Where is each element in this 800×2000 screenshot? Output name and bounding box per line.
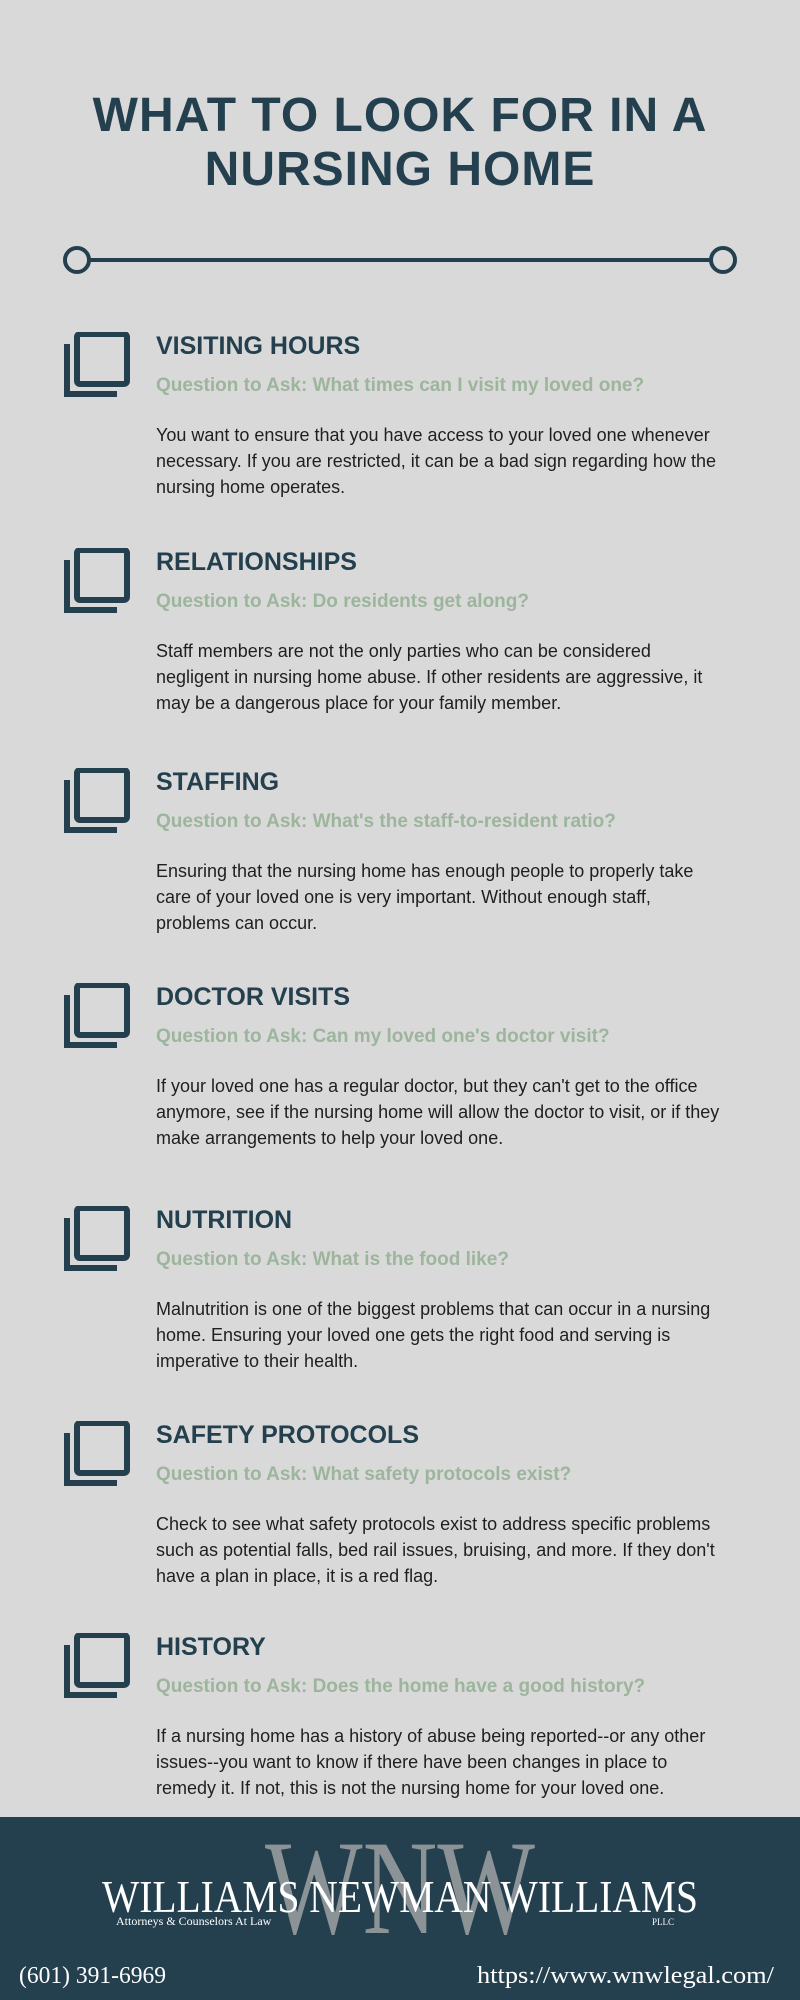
section: nutrition [64, 1206, 710, 1371]
heading: STAFFING [156, 768, 279, 796]
icon [64, 768, 130, 833]
question: Question to Ask: Does the home have a good history? [156, 1676, 645, 1697]
body: Malnutrition is one of the biggest problems that can occur in a nursing home. Ensuring your loved one gets the right food and serving is imperative to their health. [156, 1299, 710, 1371]
footer [0, 1817, 800, 2000]
title: WHAT TO LOOK FOR IN A [93, 89, 707, 142]
logo: WILLIAMS NEWMAN WILLIAMS [102, 1871, 698, 1922]
title [92, 89, 707, 196]
question: Question to Ask: What safety protocols exist? [156, 1464, 571, 1485]
icon [64, 1633, 130, 1698]
title: NURSING HOME [205, 143, 595, 196]
body: You want to ensure that you have access to your loved one whenever necessary. If you are restricted, it can be a bad sign regarding how the nursing home operates. [156, 425, 716, 497]
body: Ensuring that the nursing home has enough people to properly take care of your loved one is very important. Without enough staff, problems can occur. [156, 861, 693, 933]
question: Question to Ask: What times can I visit my loved one? [156, 375, 644, 396]
logo: PLLC [652, 1917, 674, 1927]
body: Staff members are not the only parties who can be considered negligent in nursing home abuse. If other residents are aggressive, it may be a dangerous place for your family member. [156, 641, 702, 713]
icon [64, 1206, 130, 1271]
body: If your loved one has a regular doctor, but they can't get to the office anymore, see if the nursing home will allow the doctor to visit, or if they make arrangements to help your loved one. [156, 1076, 719, 1148]
icon [64, 983, 130, 1048]
section: relationships [64, 548, 702, 713]
divider with circles [63, 246, 737, 274]
body: If a nursing home has a history of abuse being reported--or any other issues--you want to know if there have been changes in place to remedy it. If not, this is not the nursing home for your loved one. [156, 1726, 705, 1798]
icon [64, 548, 130, 613]
heading: VISITING HOURS [156, 332, 360, 360]
website: https://www.wnwlegal.com/ [477, 1963, 774, 1989]
section: safety protocols [64, 1421, 715, 1586]
question: Question to Ask: Do residents get along? [156, 591, 529, 612]
phone: (601) 391-6969 [19, 1963, 166, 1989]
icon [64, 1421, 130, 1486]
logo [19, 1817, 774, 1989]
heading: HISTORY [156, 1633, 266, 1661]
icon [64, 332, 130, 397]
body: Check to see what safety protocols exist to address specific problems such as potential falls, bed rail issues, bruising, and more. If they don't have a plan in place, it is a red flag. [156, 1514, 715, 1586]
section: staffing [64, 768, 693, 933]
heading: NUTRITION [156, 1206, 292, 1234]
section: history [64, 1633, 706, 1798]
heading: DOCTOR VISITS [156, 983, 350, 1011]
question: Question to Ask: What's the staff-to-resident ratio? [156, 811, 616, 832]
heading: RELATIONSHIPS [156, 548, 357, 576]
logo: WNW [265, 1817, 535, 1963]
logo: Attorneys & Counselors At Law [116, 1914, 272, 1928]
heading: SAFETY PROTOCOLS [156, 1421, 419, 1449]
section: visiting hours [64, 332, 716, 497]
section: doctor visits [64, 983, 720, 1148]
question: Question to Ask: What is the food like? [156, 1249, 509, 1270]
question: Question to Ask: Can my loved one's doctor visit? [156, 1026, 610, 1047]
